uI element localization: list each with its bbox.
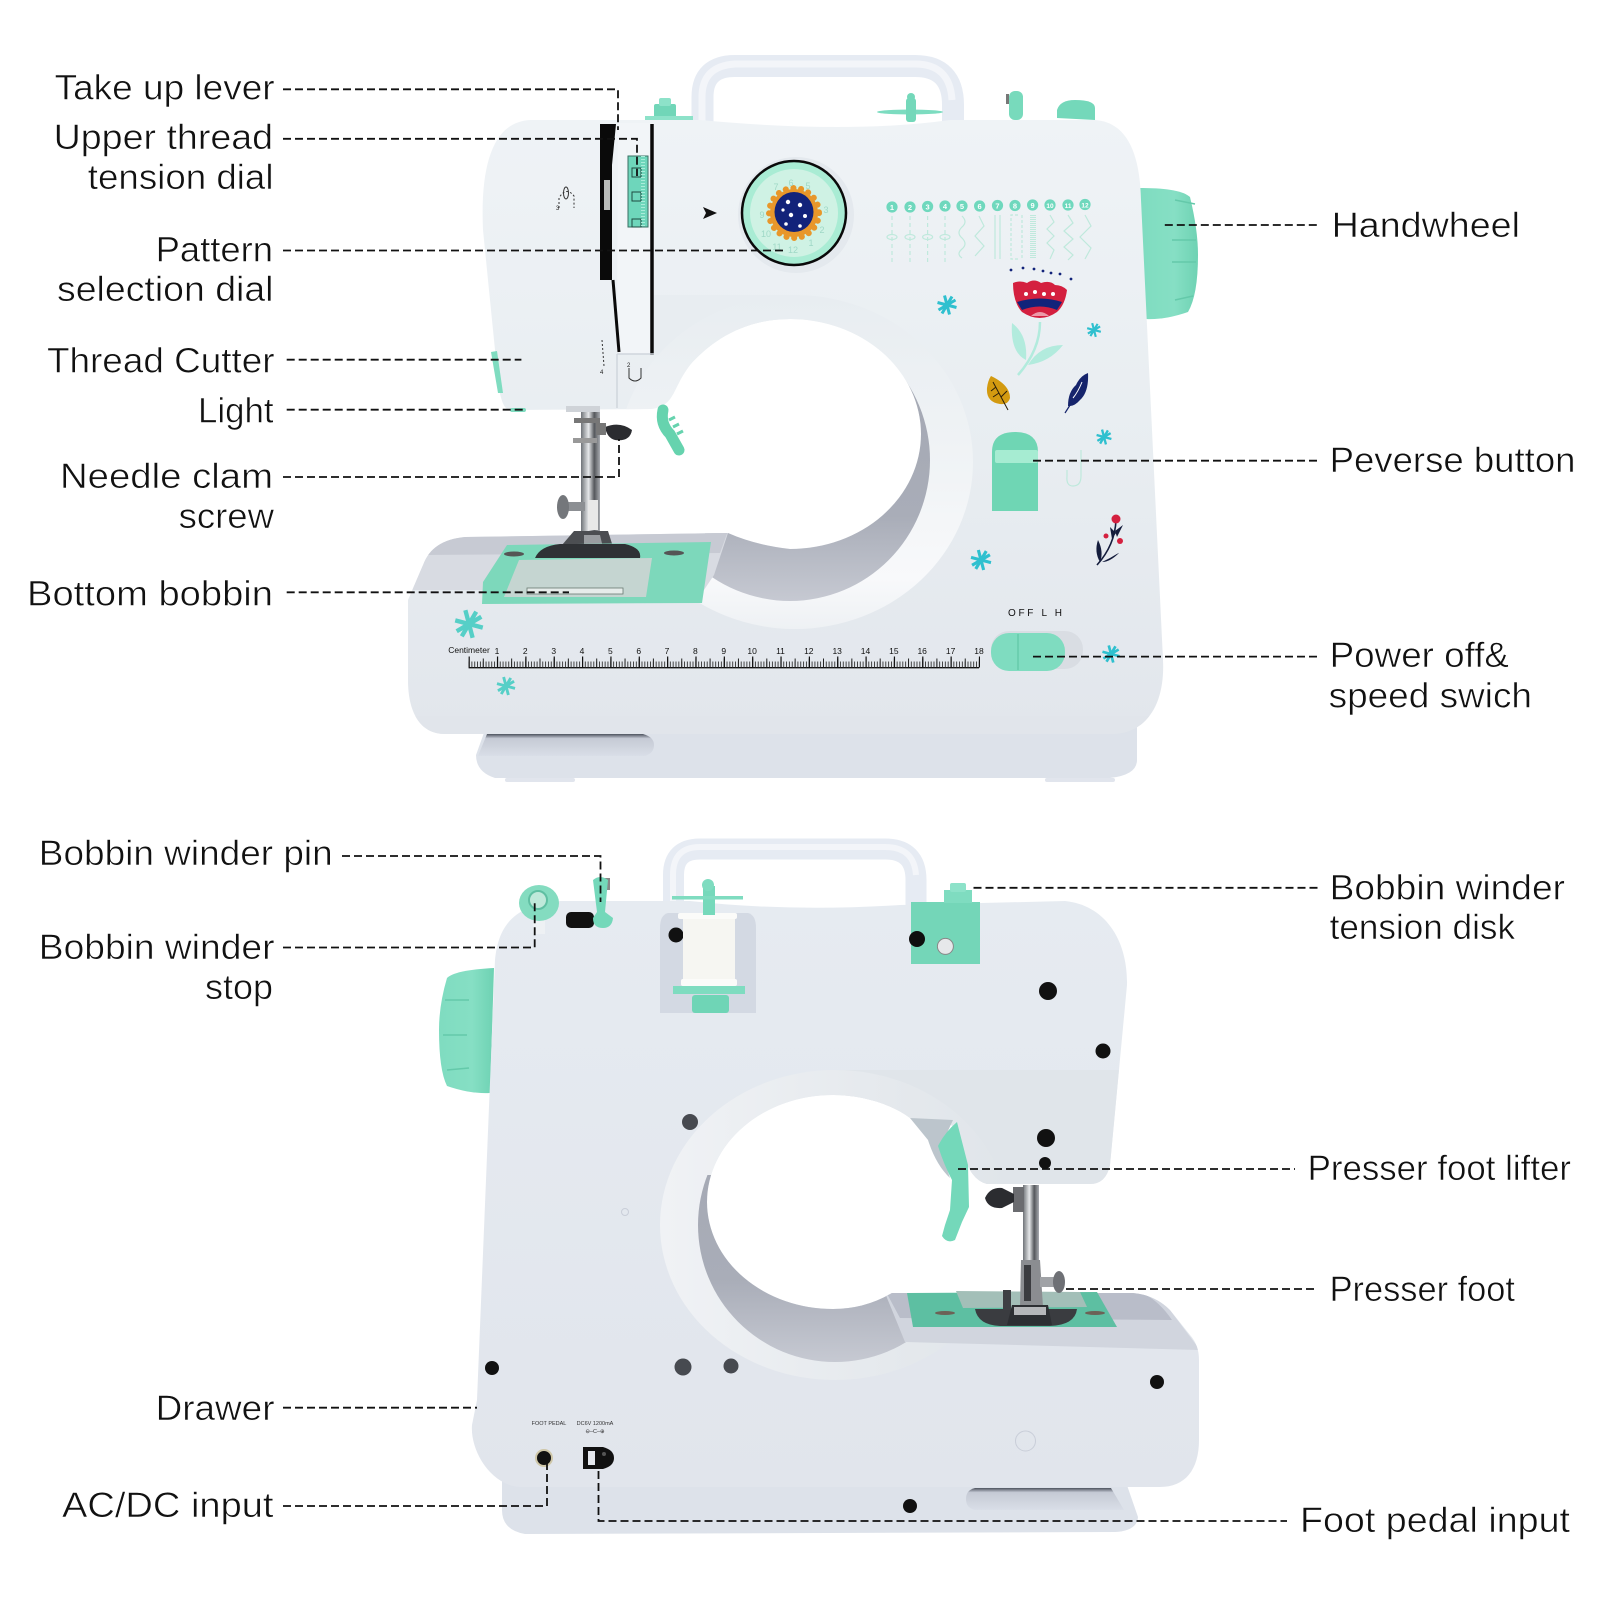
thread channel	[600, 123, 654, 408]
presser foot lifter	[662, 410, 683, 450]
label: foot pedal input	[598, 1471, 1570, 1540]
label: upper thread tension dial	[54, 118, 637, 197]
thread cutter and light	[491, 351, 526, 412]
port labels: FOOT PEDAL	[532, 1421, 566, 1427]
label: take up lever	[55, 68, 618, 130]
label: reverse button: Peverse button	[1330, 441, 1576, 480]
label: take up lever: Take up lever	[55, 68, 275, 108]
ruler: 12	[804, 646, 814, 656]
stitch pattern chart: 12	[1081, 202, 1089, 210]
label: upper thread tension dial: Upper thread	[54, 118, 273, 157]
label: handwheel: Handwheel	[1332, 206, 1520, 245]
speed switch	[991, 608, 1083, 671]
speed switch: OFF L H	[1008, 608, 1062, 619]
label: thread cutter: Thread Cutter	[47, 341, 275, 380]
lever recess	[910, 1118, 953, 1178]
ruler: 13	[832, 646, 842, 656]
stitch pattern chart: 11	[1065, 203, 1072, 210]
threading guide icons: 4	[600, 370, 604, 376]
ruler: 5	[608, 646, 613, 656]
label: AC/DC input	[62, 1458, 547, 1525]
handwheel	[1140, 188, 1198, 319]
ruler: 8	[693, 646, 698, 656]
rear lever	[938, 1122, 969, 1241]
stitch pattern chart: 4	[943, 202, 948, 211]
label: presser foot: Presser foot	[1330, 1270, 1515, 1309]
label: needle clam screw: Needle clam	[60, 457, 273, 496]
label: power and speed switch: Power off&	[1330, 636, 1509, 675]
rear ring and base surface	[660, 1070, 1200, 1380]
stitch pattern chart: 7	[995, 202, 1000, 210]
label: bobbin winder stop: Bobbin winder	[39, 928, 275, 967]
rear needle assembly	[985, 1185, 1065, 1325]
label: drawer: Drawer	[156, 1389, 275, 1428]
rear sewing plate	[907, 1291, 1117, 1327]
ruler: 16	[917, 646, 927, 656]
ruler: 11	[776, 646, 785, 656]
stitch pattern chart: 9	[1031, 201, 1035, 210]
stitch pattern chart: 10	[1046, 203, 1054, 210]
label: power and speed switch	[1033, 636, 1532, 716]
pattern selection dial: 10	[761, 229, 771, 239]
rear body	[472, 901, 1199, 1487]
reverse button	[992, 432, 1081, 511]
pattern selection dial: 1	[808, 238, 814, 248]
rear slot	[966, 1488, 1124, 1510]
label: foot pedal input: Foot pedal input	[1300, 1501, 1570, 1540]
ruler: 15	[889, 646, 899, 656]
machine body	[408, 120, 1163, 734]
label: bobbin winder pin	[39, 834, 601, 902]
stitch pattern chart: 6	[978, 202, 982, 211]
pattern selection dial: 12	[788, 245, 798, 255]
pattern selection dial	[738, 157, 854, 273]
stitch pattern chart	[886, 199, 1091, 262]
threading guide icons	[556, 187, 641, 381]
pattern selection dial: 9	[759, 210, 765, 220]
yellow leaf decal	[987, 376, 1010, 410]
berry sprig decal	[1096, 514, 1123, 565]
ruler: 10	[747, 646, 757, 656]
bottom platform	[476, 715, 1137, 782]
pattern selection dial: 6	[788, 178, 794, 188]
pattern selection dial: 11	[772, 242, 782, 252]
label: bobbin winder stop: stop	[205, 968, 273, 1007]
label: needle clam screw: screw	[179, 497, 275, 536]
pattern selection dial: 7	[773, 182, 779, 192]
stitch pattern chart: 5	[960, 202, 964, 211]
needle bar assembly	[557, 406, 632, 558]
handle	[702, 64, 953, 128]
stitch pattern chart: 8	[1013, 202, 1017, 210]
port labels	[532, 1421, 614, 1435]
molded circles	[622, 1208, 1036, 1451]
ruler: 9	[721, 646, 726, 656]
label: pattern selection dial: selection dial	[57, 270, 274, 309]
pattern selection dial: 5	[805, 181, 811, 191]
ruler: 18	[974, 646, 984, 656]
label: bottom bobbin: Bottom bobbin	[27, 575, 273, 614]
bobbin winder pin rear	[566, 877, 613, 928]
jack	[536, 1450, 552, 1466]
port labels: ⊖–C–⊕	[585, 1429, 605, 1435]
port labels: DC6V 1200mA	[577, 1421, 614, 1427]
label: pattern selection dial	[57, 231, 787, 309]
ruler: 4	[580, 646, 585, 656]
label: bobbin winder tension disk: tension disk	[1330, 908, 1516, 947]
rear bottom platform	[502, 1465, 1138, 1534]
ruler: 17	[946, 646, 956, 656]
body shading, arch ring and base surface	[400, 295, 1180, 736]
label: bobbin winder pin: Bobbin winder pin	[39, 834, 333, 873]
label: power and speed switch: speed swich	[1329, 677, 1532, 716]
top spools and pins	[645, 91, 1095, 122]
label: AC/DC input: AC/DC input	[62, 1486, 274, 1525]
rear sewing machine	[439, 847, 1200, 1534]
stitch pattern chart: 2	[908, 203, 912, 212]
navy leaf decal	[1065, 373, 1088, 413]
screw holes	[485, 982, 1164, 1513]
label: pattern selection dial: Pattern	[156, 231, 273, 270]
threading guide icons: 3	[556, 206, 560, 212]
ruler: 7	[665, 646, 670, 656]
stitch pattern chart: 1	[890, 203, 894, 212]
rear spool recess	[660, 879, 756, 1013]
tension block	[909, 883, 980, 964]
decorative asterisks	[455, 296, 1120, 695]
ruler: Centimeter	[448, 645, 490, 655]
threading guide icons: 2	[627, 363, 631, 369]
stitch pattern chart: 3	[926, 202, 930, 212]
rear handle	[673, 847, 916, 908]
ruler: 1	[495, 646, 500, 656]
pointer arrow	[703, 207, 717, 219]
ruler: 2	[523, 646, 528, 656]
label: upper thread tension dial: tension dial	[88, 158, 274, 197]
flower decal	[1010, 267, 1072, 375]
ruler	[448, 645, 984, 668]
sewing plate and bobbin cover	[482, 542, 711, 604]
label: bobbin winder tension disk: Bobbin winder	[1330, 868, 1565, 908]
power socket	[583, 1447, 614, 1469]
label: presser foot lifter: Presser foot lifter	[1308, 1149, 1571, 1188]
label: light: Light	[198, 391, 274, 430]
ruler: 3	[551, 646, 556, 656]
pattern selection dial: 3	[823, 205, 829, 215]
ruler: 14	[861, 646, 870, 656]
bobbin winder stop rear	[519, 885, 559, 934]
upper thread tension dial	[628, 156, 648, 227]
front sewing machine	[400, 64, 1198, 782]
pattern selection dial: 2	[819, 225, 825, 235]
label: bobbin winder stop	[39, 900, 535, 1007]
ruler: 6	[636, 646, 641, 656]
label: needle clam screw	[60, 439, 619, 536]
rear handwheel	[439, 968, 494, 1093]
label: bobbin winder tension disk	[974, 868, 1565, 947]
